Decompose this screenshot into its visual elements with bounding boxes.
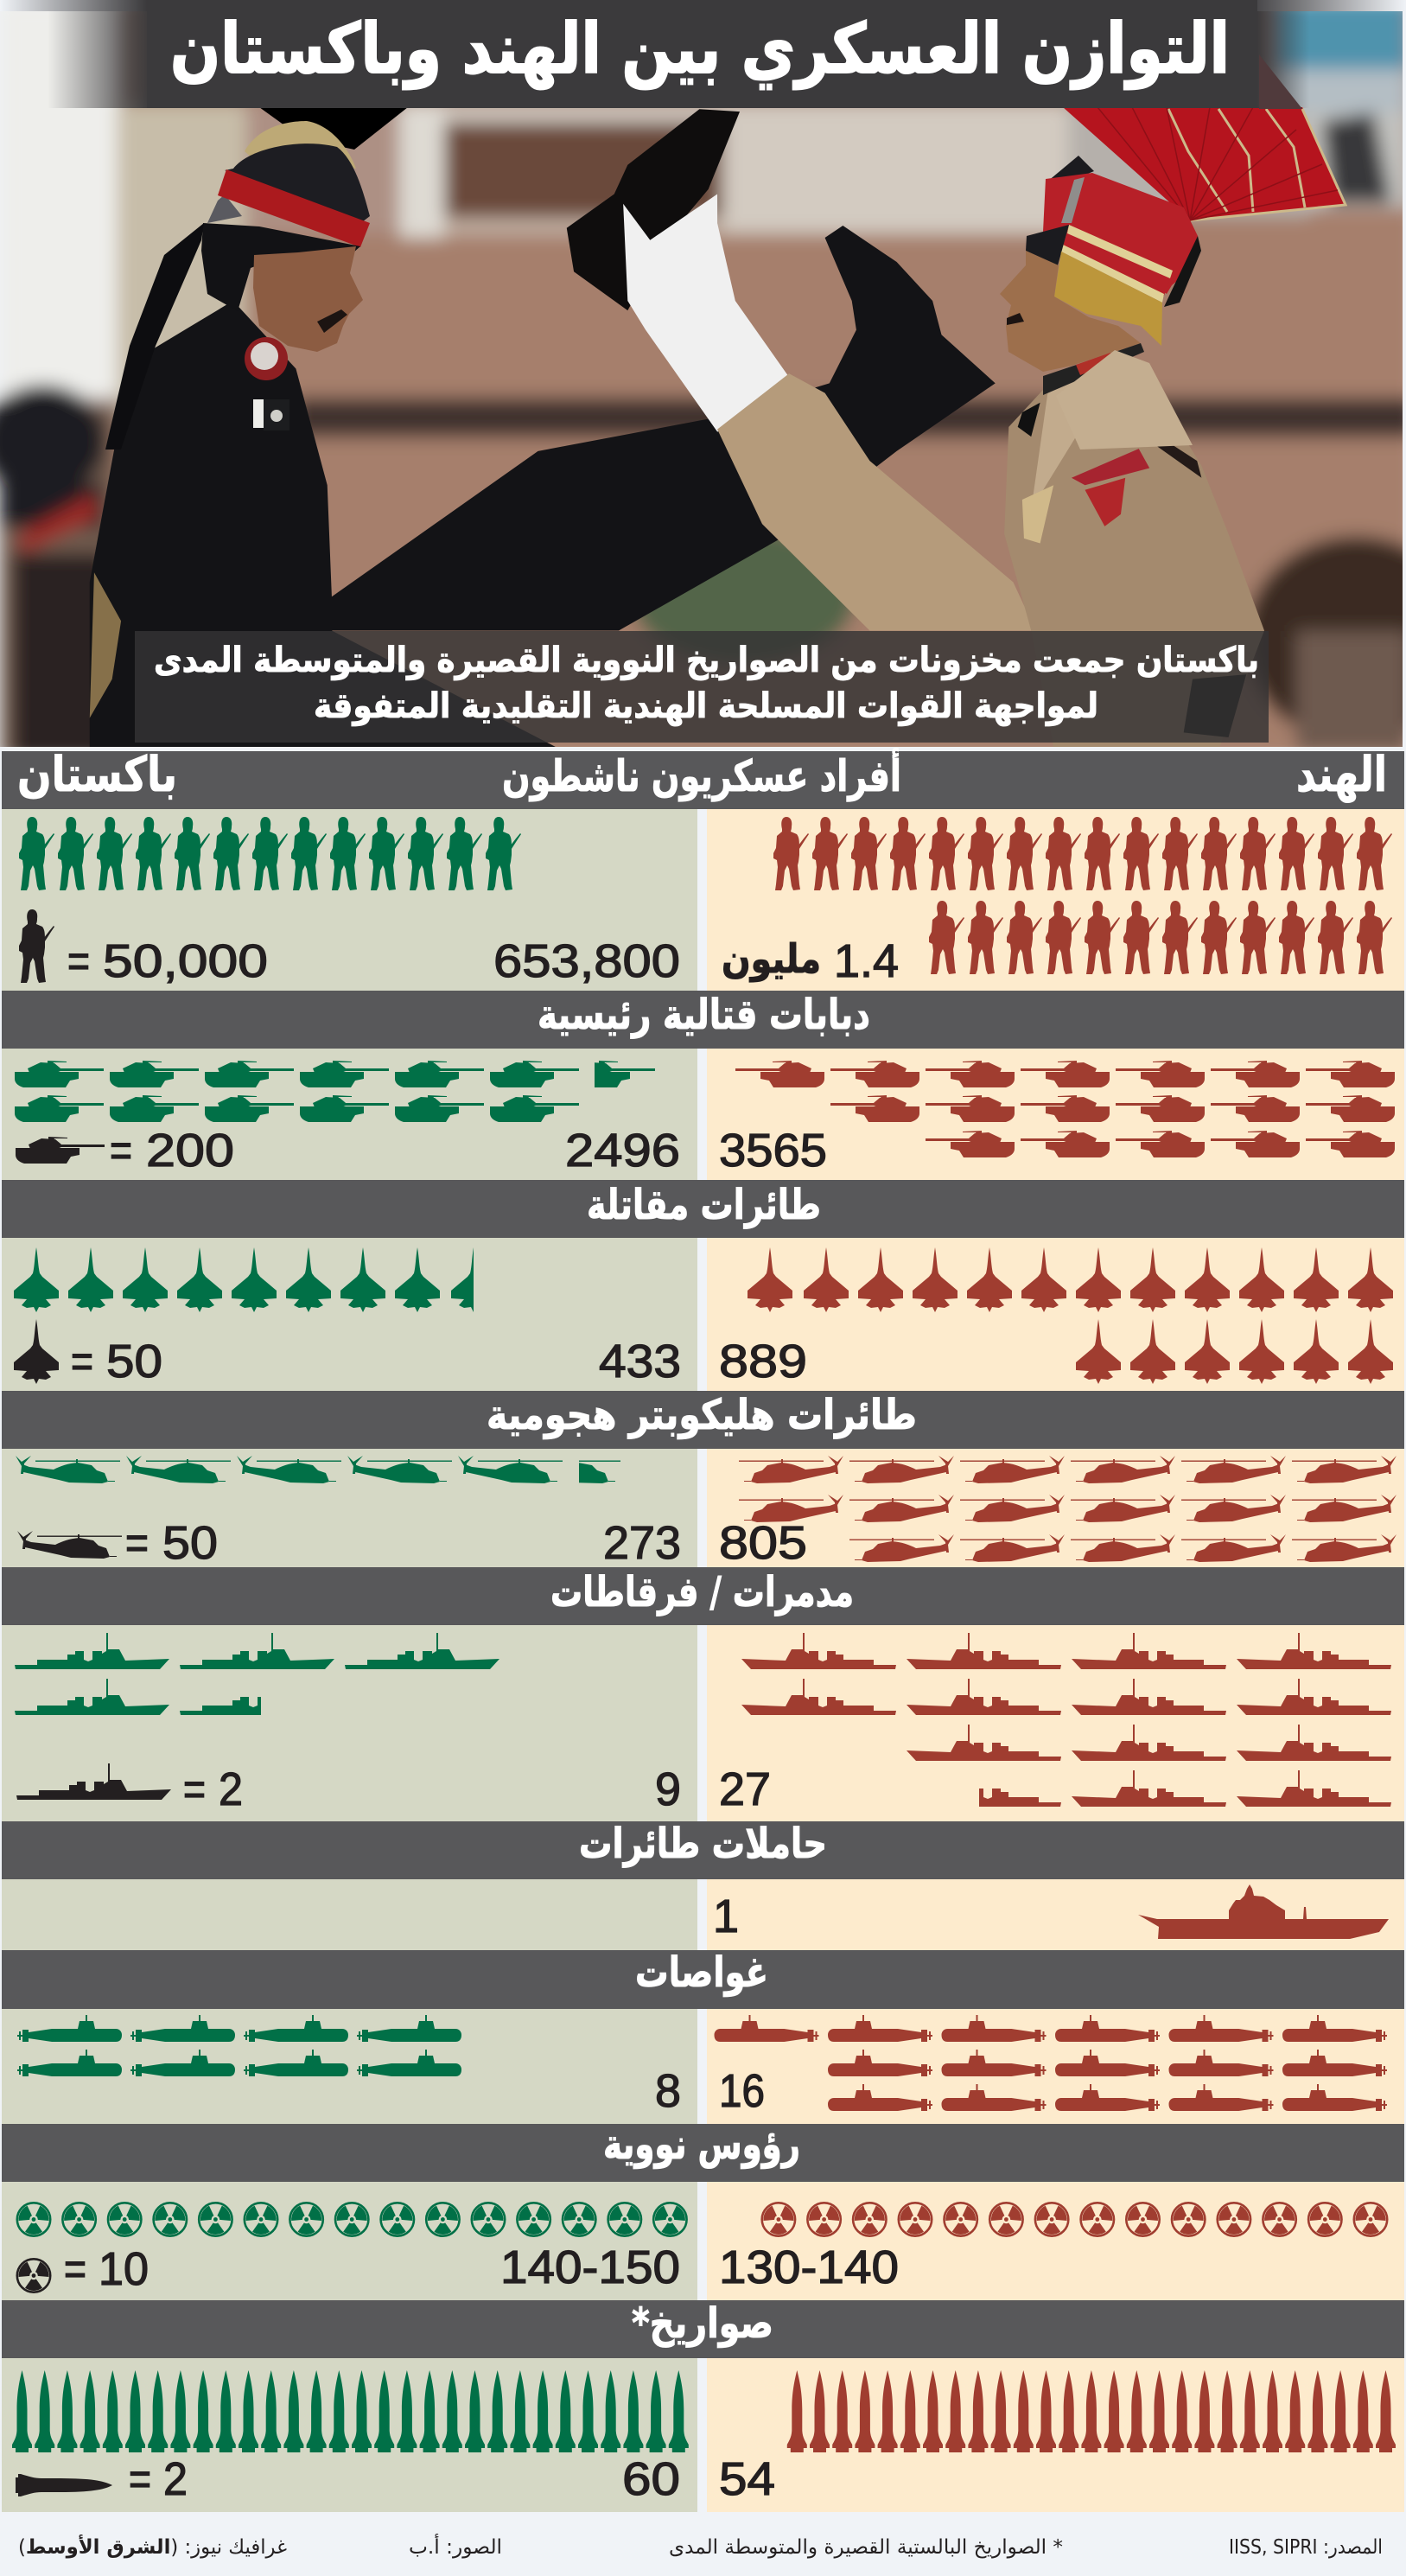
legend: warhead = 10: = <box>64 2243 86 2295</box>
title: التوازن العسكري بين الهند وباكستان <box>170 9 1230 90</box>
footnote: * الصواريخ البالستية القصيرة والمتوسطة المدى <box>669 2536 1063 2559</box>
helicopters India <box>739 1456 1396 1562</box>
heading: طائرات مقاتلة <box>587 1181 821 1229</box>
legend: ship = 2: = <box>183 1763 206 1815</box>
value Pakistan helicopters: 273 <box>603 1517 681 1569</box>
value India helicopters: 805 <box>719 1517 807 1569</box>
Pakistani soldier head <box>105 107 408 450</box>
footer <box>18 2534 1383 2559</box>
value India personnel: 1.4 <box>834 935 899 987</box>
value India missiles: 54 <box>719 2453 775 2505</box>
heading: طائرات هليكوبتر هجومية <box>487 1391 917 1439</box>
section: attack helicopters <box>16 1391 1396 1569</box>
value India warheads: 130-140 <box>719 2241 899 2293</box>
section: combat aircraft <box>14 1181 1393 1387</box>
jets India <box>748 1247 1393 1384</box>
legend: jet = 50: 50 <box>106 1336 162 1387</box>
legend: missile = 2: 2 <box>163 2453 188 2505</box>
value India carriers: 1 <box>713 1891 739 1942</box>
warheads India <box>762 2203 1387 2236</box>
value Pakistan warheads: 140-150 <box>500 2241 680 2293</box>
legend: helicopter = 50 <box>17 1517 218 1569</box>
value India tanks: 3565 <box>719 1125 827 1176</box>
value Pakistan aircraft: 433 <box>599 1336 681 1387</box>
legend: warhead = 10: 10 <box>99 2243 149 2295</box>
legend: jet = 50 <box>14 1319 162 1387</box>
submarines India <box>714 2015 1387 2111</box>
Indian soldier <box>567 109 1264 747</box>
missiles Pakistan <box>12 2370 689 2452</box>
legend: helicopter = 50: 50 <box>162 1517 218 1569</box>
legend: soldier = 50,000: 50,000 <box>103 935 268 987</box>
value India personnel <box>722 935 899 987</box>
blurred background building <box>0 0 1406 761</box>
legend: tank = 200: 200 <box>146 1125 234 1176</box>
heading: حاملات طائرات <box>579 1820 827 1868</box>
section: aircraft carriers <box>579 1820 1389 1942</box>
heading: Pakistan: باكستان <box>17 747 177 803</box>
helicopters Pakistan <box>16 1456 620 1483</box>
legend: helicopter = 50: = <box>125 1517 149 1569</box>
soldiers Pakistan <box>19 817 521 890</box>
legend: missile = 2 <box>16 2453 188 2505</box>
value Pakistan personnel: 653,800 <box>493 935 680 987</box>
value Pakistan missiles: 60 <box>622 2453 680 2505</box>
legend: jet = 50: = <box>71 1336 93 1387</box>
section: main battle tanks <box>15 991 1395 1176</box>
legend: missile = 2: = <box>129 2453 151 2505</box>
section: submarines <box>17 1948 1387 2117</box>
jets Pakistan <box>14 1247 496 1312</box>
section header bars <box>2 751 1404 2358</box>
Indian soldier head and fan <box>1000 107 1346 450</box>
subtitle line 2: لمواجهة القوات المسلحة الهندية التقليدية المتفوقة <box>314 686 1098 726</box>
tanks India <box>735 1061 1395 1157</box>
heading: مدمرات / فرقاطات <box>550 1568 854 1616</box>
heading: غواصات <box>635 1948 768 1997</box>
photo credit: الصور: أ.ب <box>409 2534 502 2559</box>
heading: active military personnel: أفراد عسكريون ناشطون <box>502 748 901 802</box>
legend: tank = 200 <box>16 1125 234 1176</box>
title strip fades at the top corners <box>0 0 1406 109</box>
icon: aircraft carrier <box>1138 1884 1389 1939</box>
soldiers India <box>773 817 1392 974</box>
submarines Pakistan <box>17 2015 461 2076</box>
graphic credit: غرافيك نيوز: (الشرق الأوسط) <box>18 2534 287 2559</box>
source: المصدر: IISS, SIPRI <box>1229 2536 1383 2559</box>
legend: tank = 200: = <box>110 1125 132 1176</box>
heading: رؤوس نووية <box>603 2120 800 2169</box>
warheads Pakistan <box>17 2203 687 2236</box>
value Pakistan submarines: 8 <box>655 2065 681 2117</box>
panels: India column <box>707 809 1404 2512</box>
legend: soldier = 50,000: = <box>67 935 90 987</box>
section: destroyers and frigates <box>15 1568 1391 1815</box>
value India aircraft: 889 <box>719 1336 807 1387</box>
subtitle line 1: باكستان جمعت مخزونات من الصواريخ النووية القصيرة والمتوسطة المدى <box>154 641 1259 680</box>
value Pakistan ships: 9 <box>655 1763 681 1815</box>
legend: ship = 2: 2 <box>219 1763 243 1815</box>
section: active military personnel <box>17 747 1392 987</box>
photo: Wagah border ceremony soldiers <box>0 0 1406 761</box>
section: missiles <box>12 2299 1396 2505</box>
legend: ship = 2 <box>16 1763 243 1815</box>
value Pakistan tanks: 2496 <box>565 1125 680 1176</box>
value India personnel: مليون <box>722 935 821 982</box>
heading: دبابات قتالية رئيسية <box>538 991 870 1039</box>
legend: soldier = 50,000 <box>19 909 268 987</box>
section: nuclear warheads <box>17 2120 1387 2295</box>
missiles India <box>787 2370 1396 2452</box>
tanks Pakistan <box>15 1061 655 1122</box>
subtitle panel <box>135 631 1269 743</box>
Pakistani soldier <box>90 226 996 747</box>
value India submarines: 16 <box>719 2065 765 2117</box>
heading: صواريخ* <box>632 2299 773 2348</box>
value India ships: 27 <box>719 1763 771 1815</box>
legend: warhead = 10 <box>17 2243 149 2295</box>
ships Pakistan <box>15 1633 499 1715</box>
ships India <box>741 1633 1391 1807</box>
panels: Pakistan column <box>2 809 697 2512</box>
